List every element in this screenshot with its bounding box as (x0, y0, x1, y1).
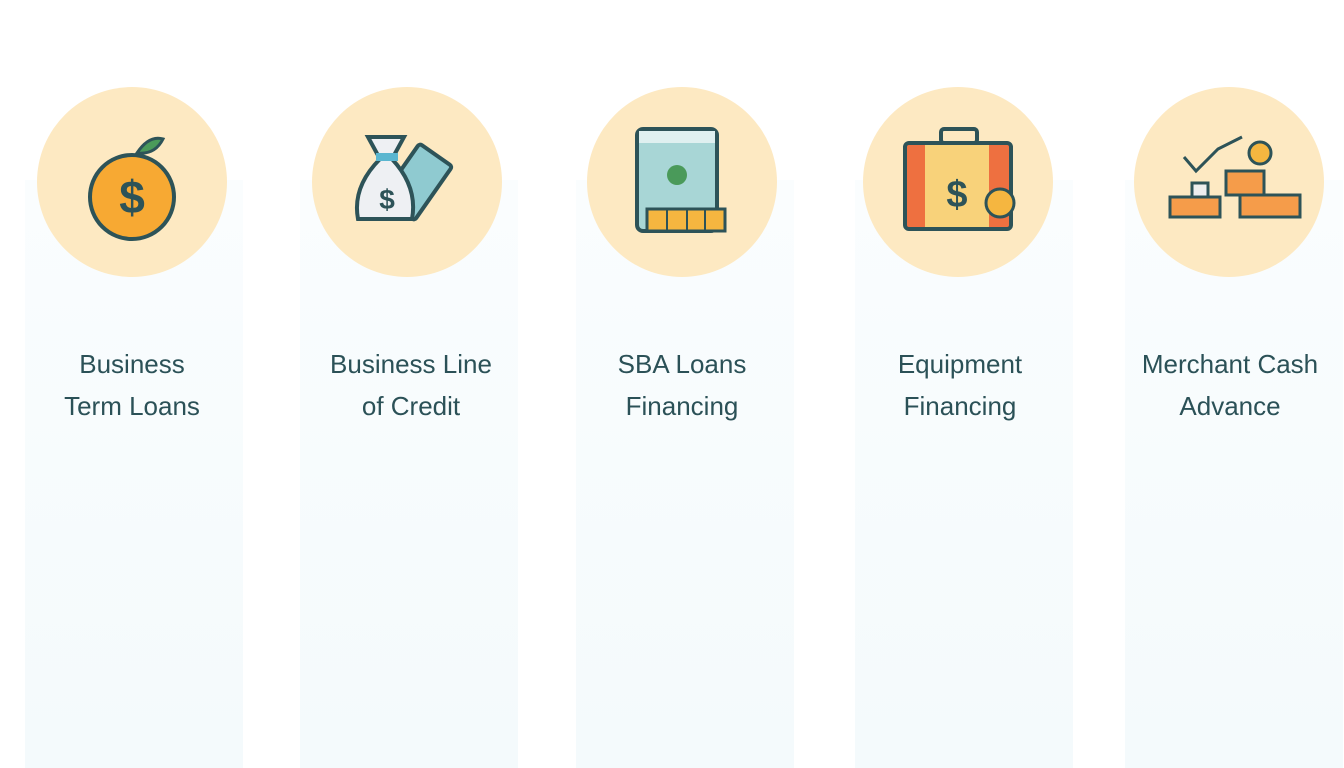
label: Merchant Cash Advance: Advance (1179, 391, 1281, 421)
label: Merchant Cash Advance: Merchant Cash (1142, 349, 1318, 379)
icon: orange with dollar (37, 87, 227, 277)
label: Business Line of Credit: Business Line (330, 349, 492, 379)
label: SBA Loans Financing (618, 349, 746, 421)
label: Business Term Loans: Business (79, 349, 185, 379)
icon: money bag and bill: $ (379, 184, 395, 215)
label: Equipment Financing: Equipment (898, 349, 1022, 379)
icon: equipment toolbox (863, 87, 1053, 277)
icon: equipment toolbox: $ (946, 174, 968, 216)
label: Business Line of Credit: of Credit (362, 391, 460, 421)
label: Equipment Financing (898, 349, 1022, 421)
label: Equipment Financing: Financing (904, 391, 1016, 421)
panel: business line of credit (300, 180, 518, 768)
panel: SBA loans (576, 180, 794, 768)
label: Business Line of Credit (330, 349, 492, 421)
panel: equipment financing (855, 180, 1073, 768)
label: SBA Loans Financing: SBA Loans (618, 349, 746, 379)
icon: orange with dollar: $ (119, 171, 145, 223)
icon: merchant chart with coins (1134, 87, 1324, 277)
panel: business term loans (25, 180, 243, 768)
icon: money bag and bill (312, 87, 502, 277)
panel: merchant cash advance (1125, 180, 1343, 768)
icon: SBA safe with coins (587, 87, 777, 277)
label: Business Term Loans: Term Loans (64, 391, 200, 421)
label: Merchant Cash Advance (1142, 349, 1318, 421)
label: Business Term Loans (64, 349, 200, 421)
label: SBA Loans Financing: Financing (626, 391, 738, 421)
